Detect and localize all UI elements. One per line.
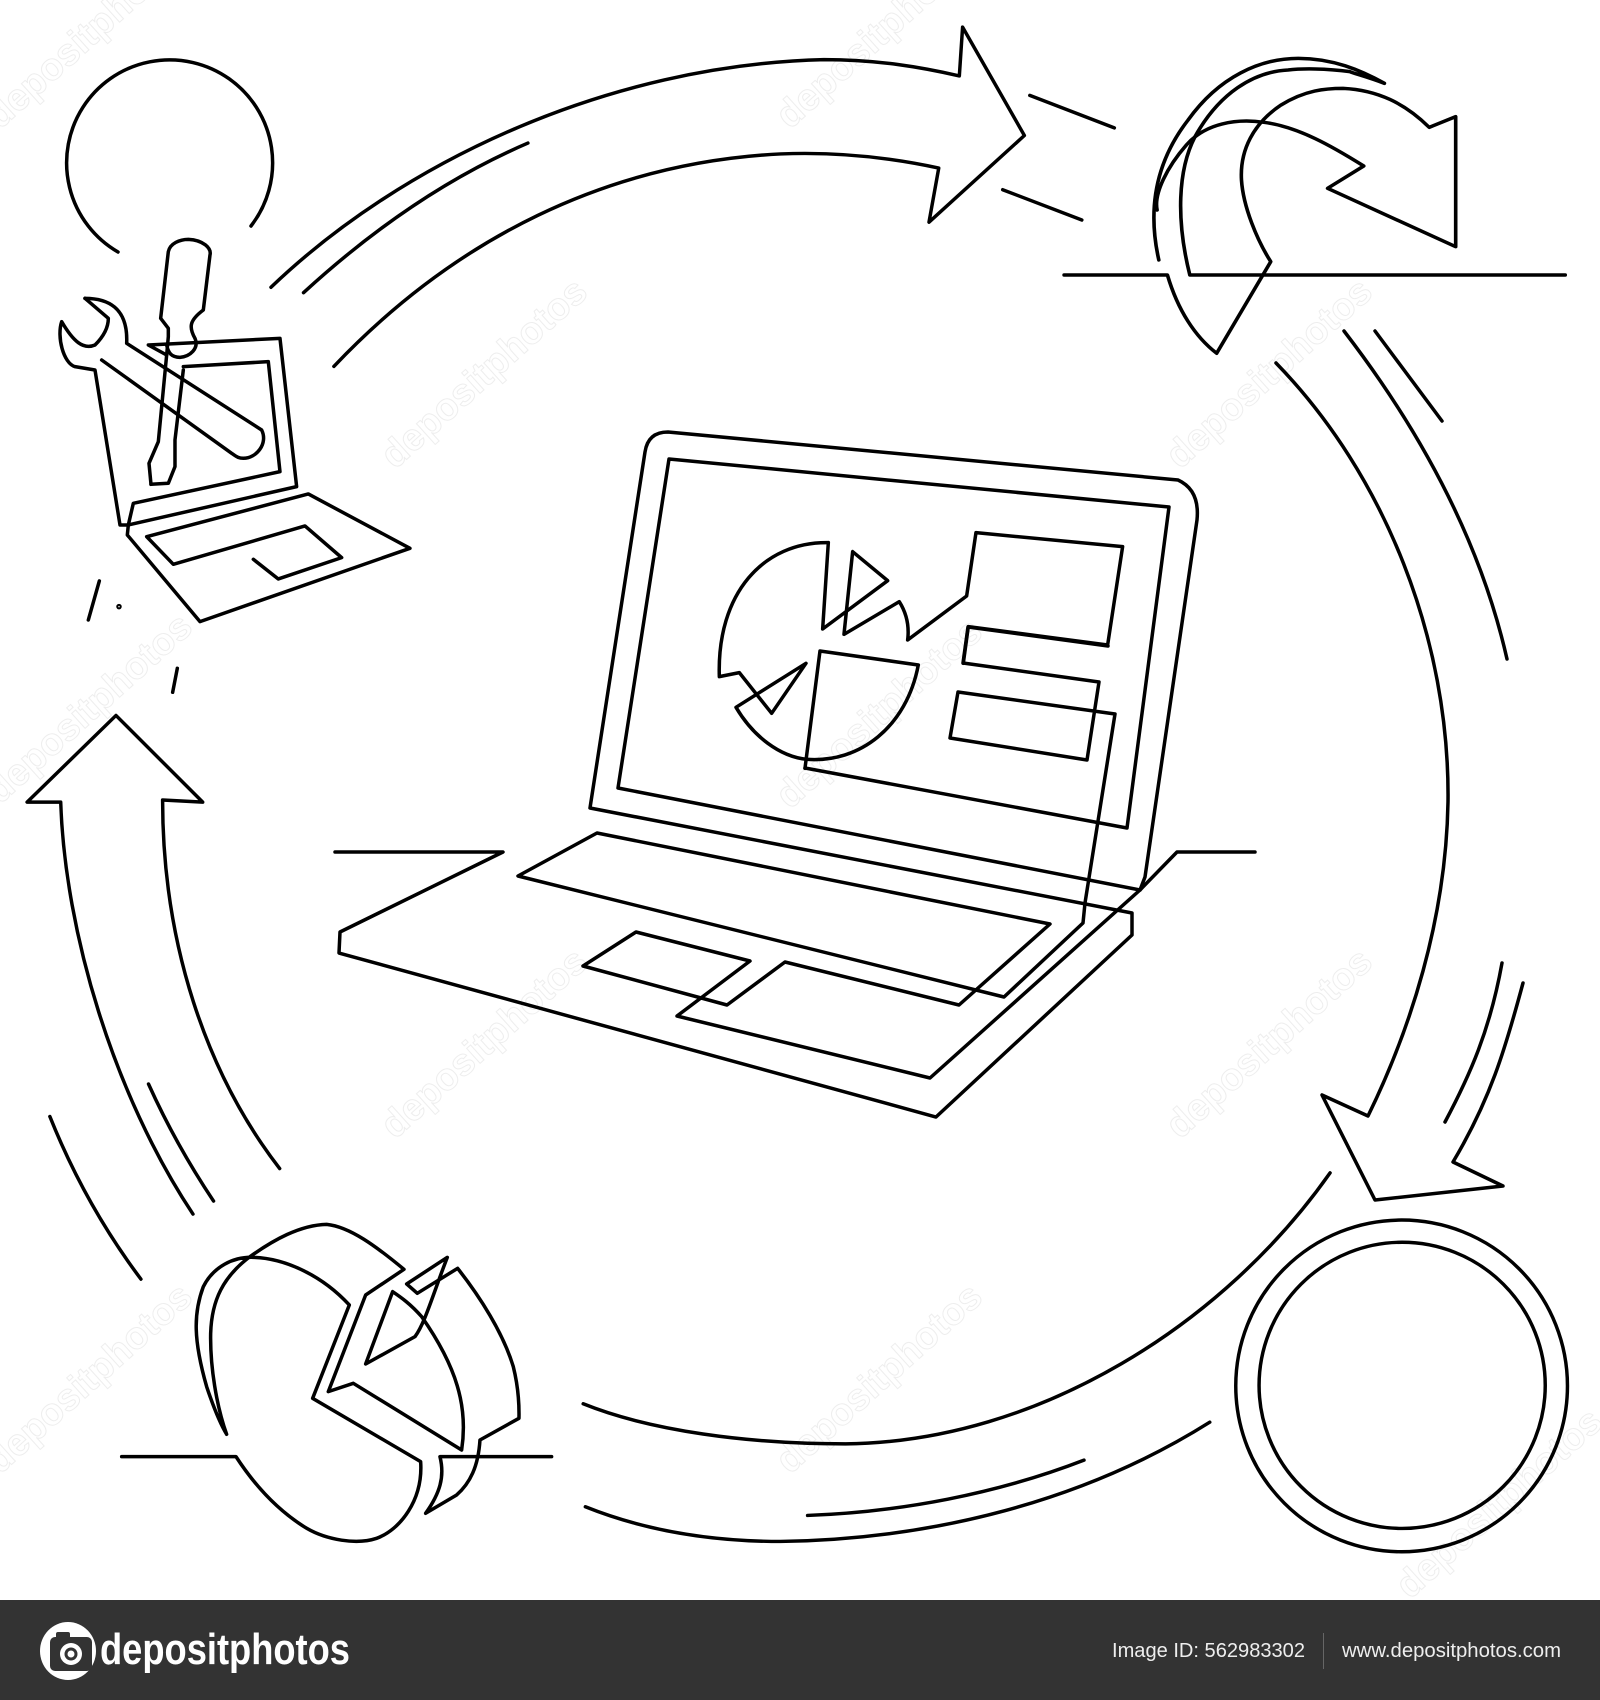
screen: pie chart and text blocks bbox=[719, 533, 1123, 768]
footer bar bbox=[0, 1600, 1600, 1700]
laptop keyboard and trackpad bbox=[518, 627, 1140, 1078]
central laptop bbox=[335, 432, 1255, 1117]
arrow: bottom, from circle to pie chart bbox=[583, 1173, 1330, 1541]
laptop lid and base outline bbox=[618, 459, 1255, 890]
arrow: right, from pie icon to circle bbox=[1276, 331, 1523, 1200]
website url: www.depositphotos.com bbox=[1341, 1640, 1561, 1662]
icon: laptop with wrench and screwdriver bbox=[60, 239, 410, 692]
icon: open circle top left bbox=[67, 60, 273, 252]
icon: bar chart arrow top right bbox=[1064, 58, 1565, 353]
image id: Image ID: 562983302 bbox=[1112, 1640, 1305, 1662]
icon: exploded pie chart bottom left bbox=[122, 1224, 552, 1541]
arrow: top, from tools to bar chart bbox=[271, 27, 1114, 366]
watermark pattern: depositphotos bbox=[373, 940, 596, 1147]
watermark pattern: depositphotos bbox=[1158, 270, 1381, 477]
watermark pattern: depositphotos bbox=[1158, 940, 1381, 1147]
icon: double ring circle bottom right bbox=[1236, 1220, 1567, 1552]
footer logo: depositphotos bbox=[100, 1625, 350, 1674]
watermark pattern: depositphotos bbox=[373, 270, 596, 477]
footer logo bbox=[40, 1622, 350, 1680]
watermark pattern: depositphotos bbox=[768, 610, 991, 817]
watermark pattern: depositphotos bbox=[768, 1275, 991, 1482]
arrow: left, from pie chart to tools bbox=[27, 715, 280, 1279]
